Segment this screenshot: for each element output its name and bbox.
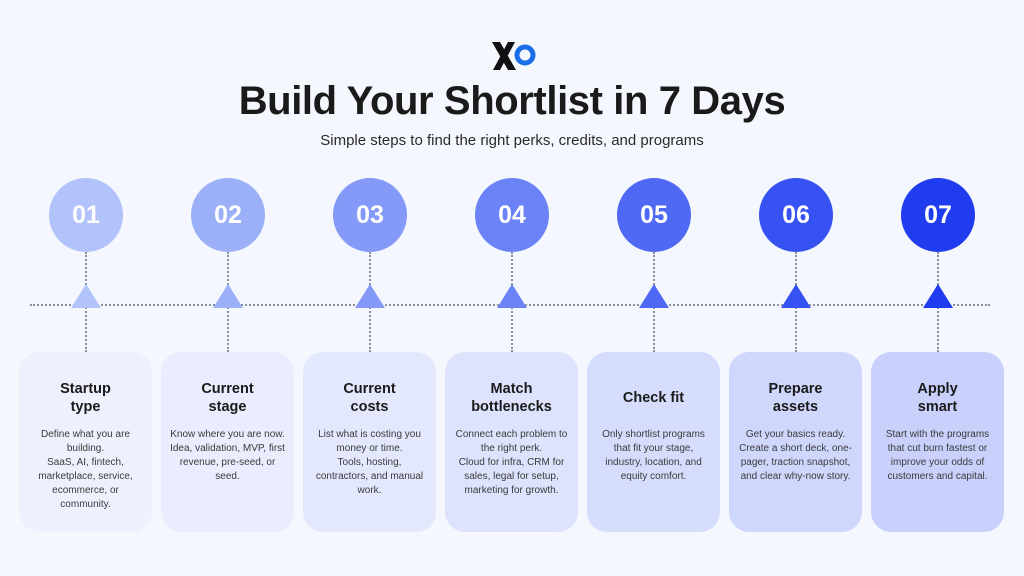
card 1: Define what you are building. — [41, 429, 130, 454]
circle 05: 05 — [640, 201, 668, 229]
card 2 — [161, 352, 294, 532]
card 1: type — [71, 399, 100, 415]
circle 07 — [901, 178, 975, 252]
card 1: SaaS, AI, fintech, marketplace, service, ecommerce, or community. — [38, 457, 133, 510]
circle 06: 06 — [782, 201, 810, 229]
card 7: Start with the programs that cut burn fastest or improve your odds of customers and capital. — [886, 429, 989, 482]
triangle 3 — [355, 284, 385, 308]
triangle 2 — [213, 284, 243, 308]
title: Build Your Shortlist in 7 Days — [239, 79, 785, 123]
card 3: costs — [351, 399, 388, 415]
card 2: stage — [209, 399, 246, 415]
card 4 — [445, 352, 578, 532]
triangle 1 — [71, 284, 101, 308]
circle 04 — [475, 178, 549, 252]
step 6 — [729, 178, 862, 532]
card 3: Current — [343, 381, 396, 397]
circle 02 — [191, 178, 265, 252]
card 4: Match — [491, 381, 532, 397]
circle 03 — [333, 178, 407, 252]
step 5 — [587, 178, 720, 532]
card 7: Apply — [917, 381, 958, 397]
card 6: Create a short deck, one-pager, traction snapshot, and clear why-now story. — [739, 443, 852, 482]
circle 01: 01 — [72, 201, 100, 229]
card 6: Prepare — [768, 381, 822, 397]
step 7 — [871, 178, 1004, 532]
circle 06 — [759, 178, 833, 252]
card 2: Know where you are now. — [170, 429, 285, 440]
card 7: smart — [918, 399, 957, 415]
step 1 — [38, 178, 133, 510]
card 5 — [587, 352, 720, 532]
step 2 — [161, 178, 294, 532]
triangle 5 — [639, 284, 669, 308]
card 2: Current — [201, 381, 254, 397]
triangle 6 — [781, 284, 811, 308]
circle 01 — [49, 178, 123, 252]
timeline line — [30, 304, 990, 306]
card 3 — [303, 352, 436, 532]
card 6 — [729, 352, 862, 532]
circle 02: 02 — [214, 201, 242, 229]
card 4: Connect each problem to the right perk. — [456, 429, 567, 454]
card 2: Idea, validation, MVP, first revenue, pre-seed, or seed. — [170, 443, 285, 482]
card 3: List what is costing you money or time. — [318, 429, 421, 454]
card 5: Only shortlist programs that fit your stage, industry, location, and equity comfort. — [602, 429, 705, 482]
card 6: Get your basics ready. — [746, 429, 845, 440]
subtitle: Simple steps to find the right perks, credits, and programs — [320, 132, 704, 149]
step 4 — [445, 178, 578, 532]
card 6: assets — [773, 399, 818, 415]
circle 05 — [617, 178, 691, 252]
card 1: Startup — [60, 381, 111, 397]
triangle 4 — [497, 284, 527, 308]
card 3: Tools, hosting, contractors, and manual work. — [316, 457, 423, 496]
card 1 — [19, 352, 152, 532]
circle 03: 03 — [356, 201, 384, 229]
step 3 — [303, 178, 436, 532]
card 5: Check fit — [623, 390, 684, 406]
triangle 7 — [923, 284, 953, 308]
card 7 — [871, 352, 1004, 532]
card 4: Cloud for infra, CRM for sales, legal for setup, marketing for growth. — [459, 457, 564, 496]
circle 04: 04 — [498, 201, 526, 229]
logo — [492, 42, 536, 70]
card 4: bottlenecks — [471, 399, 552, 415]
circle 07: 07 — [924, 201, 952, 229]
